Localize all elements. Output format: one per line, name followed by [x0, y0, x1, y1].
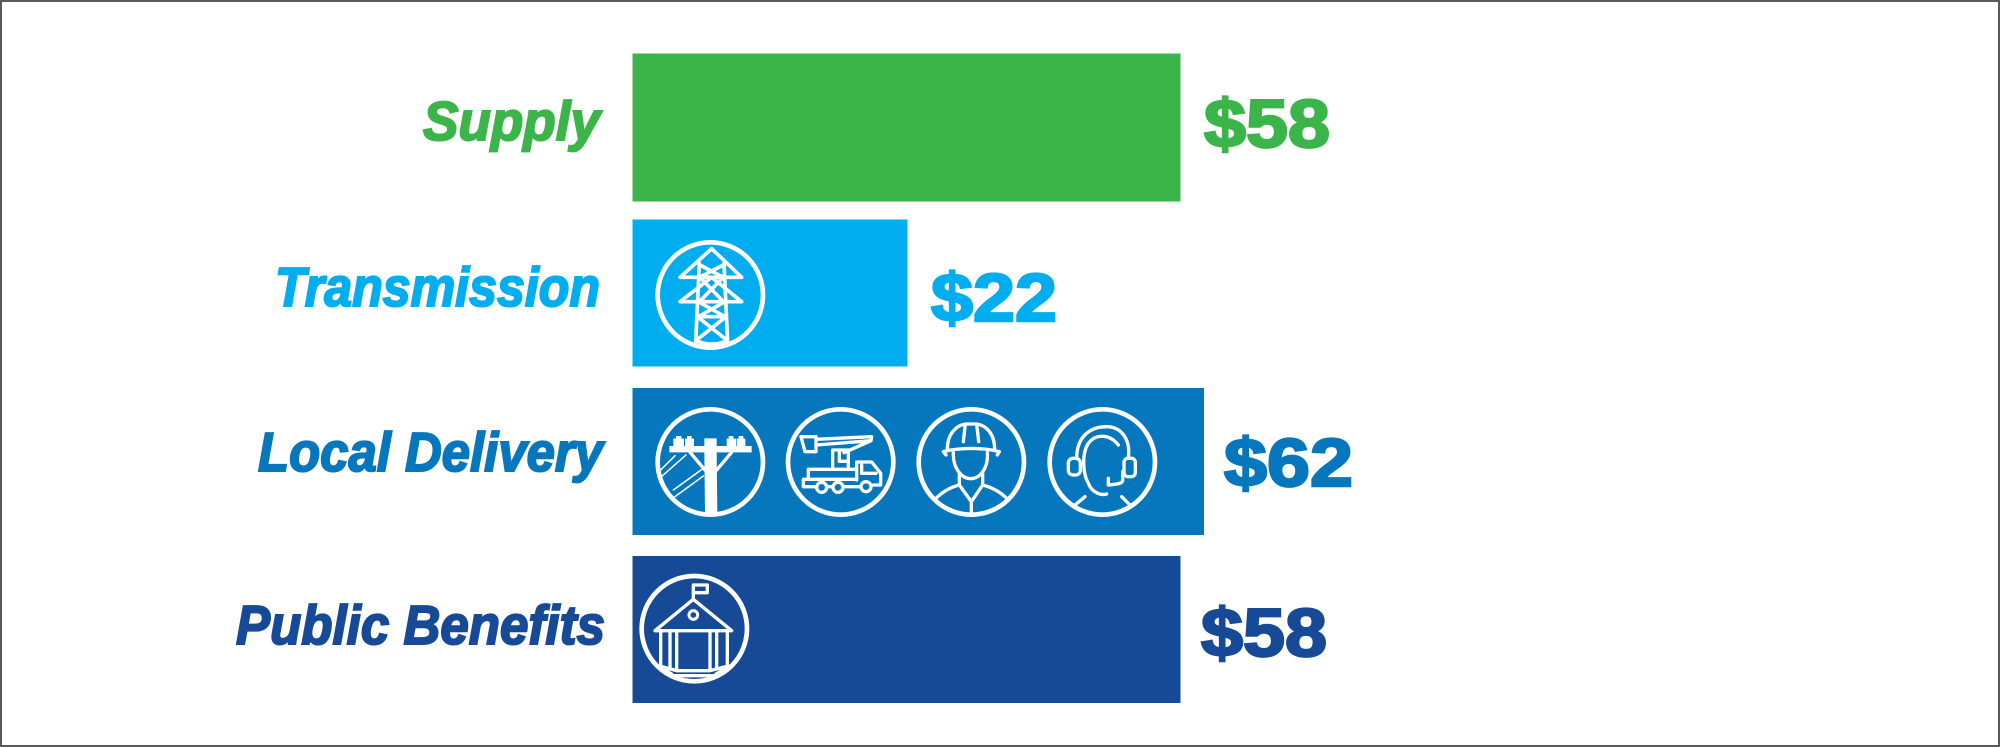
icon: worker with hard hat: [919, 409, 1024, 515]
row: Transmission: [275, 220, 1057, 366]
label: Public Benefits: Public Benefits: [236, 594, 605, 656]
value: $62: $62: [1224, 425, 1353, 501]
row: Public Benefits: [236, 556, 1327, 703]
row: Supply: [423, 54, 1330, 202]
icon: transmission tower: [658, 242, 763, 348]
label: Local Delivery: Local Delivery: [258, 421, 605, 483]
label: Supply: Supply: [423, 90, 602, 152]
icon: schoolhouse: [642, 576, 747, 681]
bar: Supply: [632, 54, 1180, 202]
row: Local Delivery: [258, 388, 1353, 535]
bar: Public Benefits: [632, 556, 1180, 703]
value: $58 supply: $58: [1204, 86, 1330, 162]
bar: Local Delivery: [632, 388, 1204, 535]
icon: bucket truck: [788, 409, 893, 515]
value: $22: $22: [931, 260, 1057, 336]
label: Transmission: Transmission: [275, 256, 600, 318]
bar: Transmission: [632, 220, 908, 366]
icon: utility pole: [658, 409, 763, 515]
icon: headset: [1050, 409, 1155, 515]
value: $58 public benefits: $58: [1201, 595, 1327, 671]
